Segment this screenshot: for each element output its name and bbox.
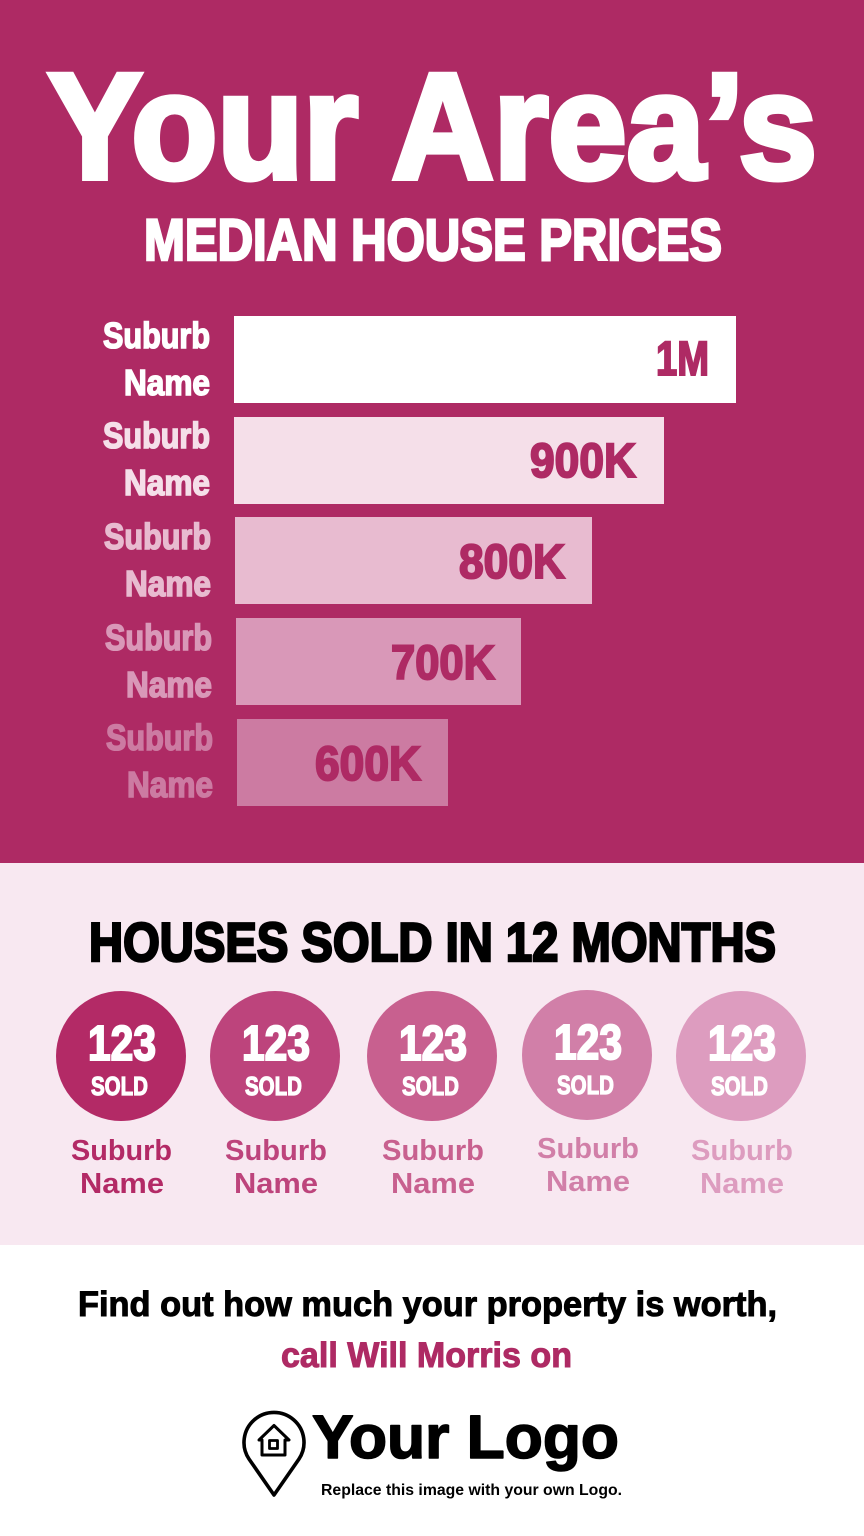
sold item 1: Name: [80, 1168, 164, 1200]
sold item 2: [210, 991, 340, 1200]
bar row: 800K: Name: [125, 563, 211, 604]
sold item 5: [676, 991, 806, 1200]
sold item 3: [367, 991, 497, 1200]
call to action: Find out how much your property is worth,: [78, 1285, 777, 1324]
sold item 1: [56, 991, 186, 1200]
sold item 5: Name: [700, 1168, 784, 1200]
panel: houses sold: [0, 863, 864, 1245]
sold item 3: SOLD: [402, 1071, 459, 1101]
sold item 4: Suburb: [537, 1133, 639, 1165]
bar row: 600K: 600K: [315, 738, 421, 791]
bar row: 1M: Name: [124, 362, 210, 403]
logo wordmark: Your Logo: [312, 1403, 619, 1471]
bar row: 900K: Suburb: [103, 415, 210, 456]
bar row: 800K: Suburb: [104, 516, 211, 557]
sold item 1: Suburb: [71, 1135, 172, 1167]
sold item 1: 123: [88, 1017, 156, 1071]
bar row: 600K: [106, 717, 448, 806]
sold item 3: Name: [391, 1168, 475, 1200]
sold item 4: 123: [554, 1016, 622, 1070]
bar row: 1M: 1M: [656, 333, 709, 386]
bar row: 900K: Name: [124, 462, 210, 503]
sold item 4: SOLD: [557, 1070, 614, 1100]
sold item 2: Suburb: [225, 1135, 327, 1167]
sold item 3: Suburb: [382, 1135, 484, 1167]
bar row: 700K: 700K: [391, 637, 495, 690]
sold item 3: 123: [399, 1017, 467, 1071]
bar row: 800K: [104, 516, 592, 604]
sold item 5: 123: [708, 1017, 776, 1071]
bar row: 600K: Name: [127, 764, 213, 805]
bar row: 900K: [103, 415, 664, 504]
sold item 4: [522, 990, 652, 1198]
bar row: 900K: 900K: [530, 435, 636, 488]
call to action: [78, 1285, 777, 1375]
sold item 5: Suburb: [691, 1135, 793, 1167]
bar row: 1M: Suburb: [103, 315, 210, 356]
icon: location pin with house: [244, 1412, 304, 1495]
logo: [244, 1403, 622, 1499]
bar row: 700K: Name: [126, 664, 212, 705]
bar row: 1M: [103, 315, 736, 403]
call to action: call Will Morris on: [281, 1336, 572, 1375]
sold item 2: 123: [242, 1017, 310, 1071]
title: Your Area’s: [48, 42, 817, 210]
logo tagline: Replace this image with your own Logo.: [321, 1482, 622, 1499]
sold item 2: SOLD: [245, 1071, 302, 1101]
sold item 4: Name: [546, 1166, 630, 1198]
sold item 1: SOLD: [91, 1071, 148, 1101]
panel: median house prices: [0, 0, 864, 863]
bar chart: [103, 315, 736, 806]
bar row: 700K: [105, 617, 521, 705]
sold item 5: SOLD: [711, 1071, 768, 1101]
subtitle: MEDIAN HOUSE PRICES: [144, 208, 722, 273]
bar row: 700K: Suburb: [105, 617, 212, 658]
sold item 2: Name: [234, 1168, 318, 1200]
bar row: 600K: Suburb: [106, 717, 213, 758]
bar row: 800K: 800K: [459, 536, 565, 589]
